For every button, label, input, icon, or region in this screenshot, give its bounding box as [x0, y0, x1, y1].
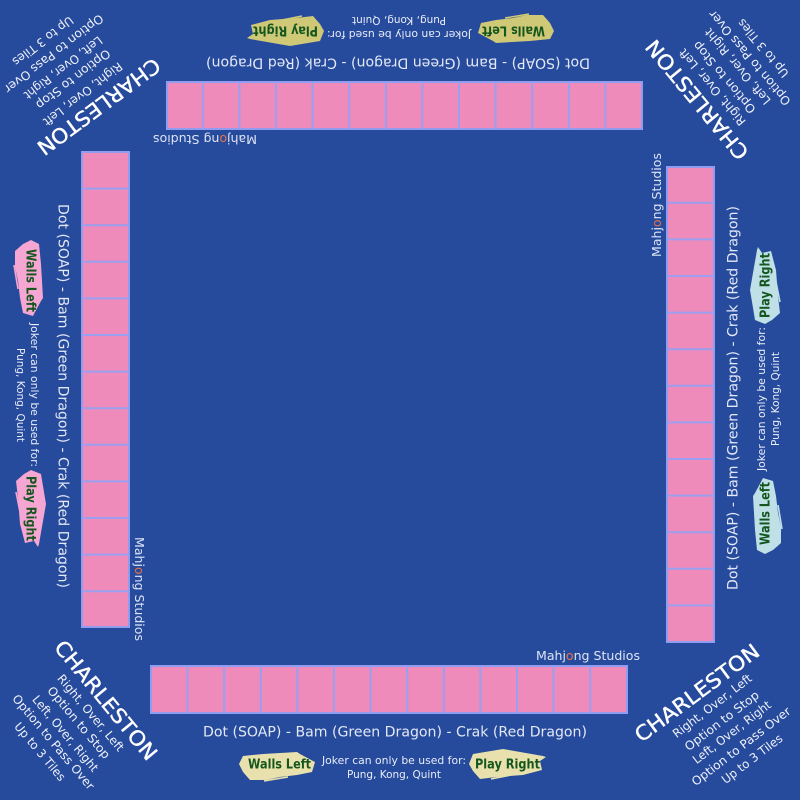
corner: Charleston bottom-right: Right, Over, Left — [670, 671, 755, 741]
corner: Charleston bottom-left: Option to Pass Over — [9, 692, 97, 793]
joker rule text: Pung, Kong, Quint — [770, 352, 782, 446]
corner: Charleston bottom-left: Option to Stop — [44, 684, 113, 762]
corner: Charleston top-left: Option to Pass Over — [2, 11, 106, 96]
label: Walls Left — [239, 752, 315, 781]
corner: Charleston top-left: Right, Over, Left — [40, 59, 125, 129]
label: Play Right: Play Right — [475, 756, 540, 772]
corner: Charleston bottom-right: CHARLESTON — [630, 639, 764, 747]
label: Walls Left: Walls Left — [248, 756, 311, 772]
tile rack: left — [82, 152, 129, 627]
corner: Charleston bottom-left: Right, Over, Left — [54, 672, 127, 754]
corner: Charleston top-right: Option to Stop — [690, 38, 759, 116]
label: Play Right — [469, 749, 546, 779]
tile rack: right — [667, 167, 714, 642]
corner: Charleston bottom-left: Up to 3 Tiles — [11, 720, 68, 784]
wind order text: Dot (SOAP) - Bam (Green Dragon) - Crak (Red Dragon) — [203, 724, 587, 740]
joker rule text: Pung, Kong, Quint — [14, 348, 26, 442]
panel: right side — [649, 153, 782, 642]
joker rule text — [321, 755, 466, 781]
tile rack: bottom — [151, 666, 627, 713]
corner: Charleston top-right: CHARLESTON — [641, 35, 754, 164]
brand: Mahjong Studios: Mahjong Studios — [536, 648, 640, 663]
panel: left side — [14, 152, 147, 641]
corner: Charleston bottom-right: Option to Stop — [682, 688, 762, 754]
corner: Charleston bottom-left — [9, 636, 162, 793]
label: Walls Left: Walls Left — [22, 249, 38, 312]
joker rule text: Pung, Kong, Quint — [347, 769, 441, 781]
joker rule text: Joker can only be used for: — [321, 755, 466, 767]
label: Walls Left: Walls Left — [482, 22, 545, 38]
corner: Charleston bottom-right: Up to 3 Tiles — [719, 731, 785, 787]
corner: Charleston top-left: Left, Over, Right — [21, 33, 105, 102]
corner: Charleston top-right — [641, 7, 794, 164]
corner: Charleston bottom-right: Option to Pass Over — [689, 704, 793, 789]
label: Play Right — [247, 16, 324, 46]
corner: Charleston top-right: Left, Over, Right — [702, 25, 774, 107]
corner: Charleston top-right: Up to 3 Tiles — [735, 16, 792, 80]
corner: Charleston top-right: Right, Over, Left — [676, 46, 749, 128]
label: Walls Left: Walls Left — [758, 482, 774, 545]
tile rack: top — [167, 82, 642, 129]
joker rule text — [14, 322, 40, 467]
label: Walls Left — [478, 14, 554, 43]
joker rule text: Joker can only be used for: — [327, 28, 472, 40]
wind order text: Dot (SOAP) - Bam (Green Dragon) - Crak (Red Dragon) — [726, 206, 742, 590]
brand: Mahjong Studios: Mahjong Studios — [153, 132, 257, 147]
corner: Charleston top-left: Up to 3 Tiles — [10, 13, 76, 69]
label: Play Right — [750, 247, 780, 324]
joker rule text — [327, 14, 472, 40]
wind order text: Dot (SOAP) - Bam (Green Dragon) - Crak (Red Dragon) — [206, 54, 590, 70]
corner: Charleston bottom-left: Left, Over, Right — [29, 693, 101, 775]
corner: Charleston bottom-left: CHARLESTON — [49, 636, 162, 765]
label: Play Right: Play Right — [758, 253, 774, 318]
corner: Charleston bottom-right: Left, Over, Right — [690, 698, 774, 767]
corner: Charleston bottom-right — [630, 639, 793, 789]
label: Walls Left — [753, 478, 782, 554]
corner: Charleston top-left — [2, 11, 165, 160]
label: Play Right: Play Right — [22, 476, 38, 541]
joker rule text — [756, 327, 782, 472]
label: Play Right: Play Right — [253, 22, 318, 38]
wind order text: Dot (SOAP) - Bam (Green Dragon) - Crak (Red Dragon) — [54, 204, 70, 588]
brand: Mahjong Studios: Mahjong Studios — [649, 153, 664, 257]
corner: Charleston top-left: CHARLESTON — [32, 53, 165, 160]
joker rule text: Pung, Kong, Quint — [352, 14, 446, 26]
panel: bottom side — [151, 648, 640, 781]
joker rule text: Joker can only be used for: — [28, 322, 40, 467]
joker rule text: Joker can only be used for: — [756, 327, 768, 472]
panel: top side — [153, 14, 642, 147]
corner: Charleston top-left: Option to Stop — [33, 46, 113, 112]
label: Walls Left — [14, 240, 43, 316]
brand: Mahjong Studios: Mahj o ng Studios — [132, 537, 147, 641]
label: Play Right — [16, 470, 46, 547]
corner: Charleston top-right: Option to Pass Over — [706, 7, 794, 108]
